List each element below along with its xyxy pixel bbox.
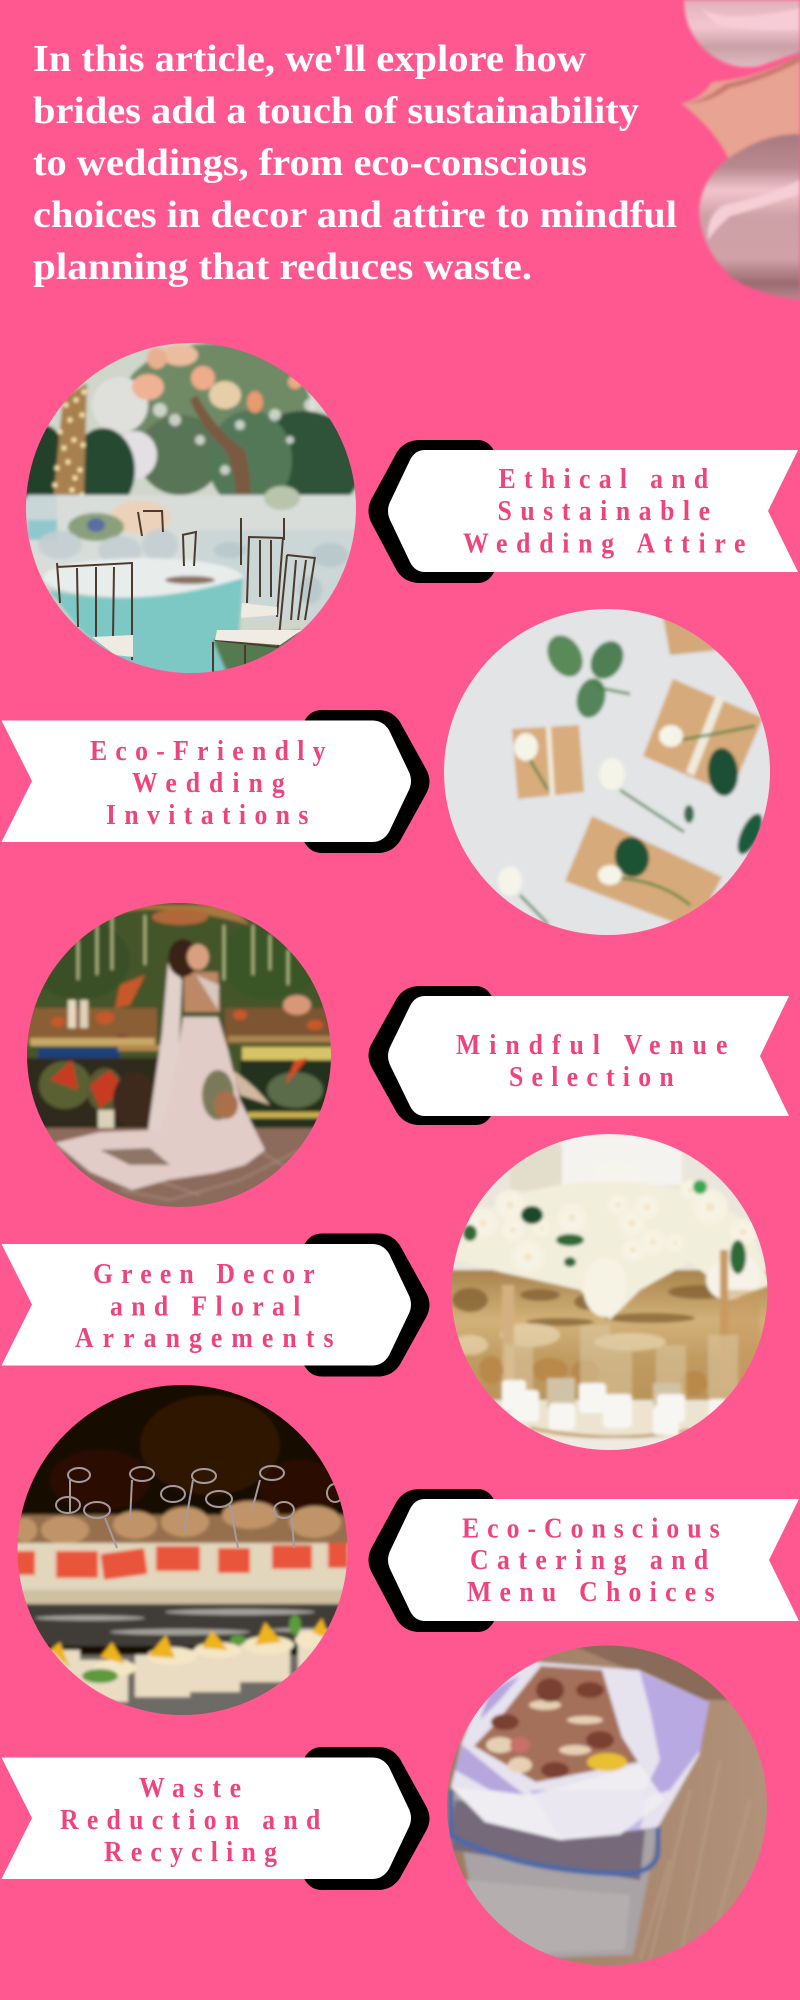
intro paragraph	[33, 38, 677, 288]
photo: food waste in a bin	[440, 1640, 775, 1975]
ribbon label: and Floral	[110, 1291, 301, 1322]
intro paragraph: to weddings, from eco-conscious	[33, 142, 587, 184]
ribbon: green decor	[2, 1234, 430, 1376]
ribbon shadow	[302, 1234, 430, 1376]
intro paragraph: planning that reduces waste.	[33, 246, 532, 288]
ribbon body	[388, 450, 798, 572]
ribbon label: Arrangements	[75, 1322, 334, 1353]
ribbon label	[60, 1772, 320, 1867]
photo: catering canapes	[13, 1380, 355, 1720]
intro paragraph: brides add a touch of sustainability	[33, 90, 639, 132]
ribbon label: Reduction and	[60, 1804, 320, 1835]
ribbon shadow	[368, 440, 496, 583]
decoration: lipstick swatches	[681, 0, 800, 300]
ribbon label: Recycling	[104, 1836, 277, 1867]
intro paragraph: choices in decor and attire to mindful	[33, 194, 677, 236]
ribbon label: Wedding Attire	[463, 528, 745, 559]
ribbon label: Wedding	[132, 767, 285, 798]
ribbon shadow	[368, 986, 494, 1125]
ribbon: ethical attire	[368, 440, 798, 583]
ribbon label: Sustainable	[498, 495, 710, 526]
ribbon label	[462, 1513, 720, 1607]
ribbon body	[2, 1758, 411, 1879]
ribbon label: Invitations	[106, 799, 308, 830]
ribbon shadow	[302, 710, 430, 853]
photo: white floral arrangement	[445, 1130, 775, 1458]
ribbon: mindful venue	[368, 986, 789, 1125]
photo: bride at green venue	[20, 900, 340, 1213]
ribbon: eco-friendly invitations	[2, 710, 430, 853]
intro paragraph: In this article, we'll explore how	[33, 38, 587, 80]
photo: outdoor reception venue	[17, 340, 363, 680]
ribbon body	[2, 720, 411, 842]
ribbon label: Menu Choices	[467, 1576, 714, 1607]
ribbon shadow	[368, 1489, 496, 1632]
ribbon label: Eco-Friendly	[90, 735, 326, 766]
ribbon label	[463, 463, 745, 559]
ribbon: waste reduction	[2, 1747, 430, 1890]
ribbon label: Catering and	[470, 1544, 708, 1575]
ribbon label: Selection	[509, 1061, 674, 1092]
photo: kraft paper invitations with roses	[440, 600, 775, 940]
ribbon: eco-conscious catering	[368, 1489, 799, 1632]
ribbon label: Mindful Venue	[456, 1029, 727, 1060]
ribbon body	[2, 1244, 411, 1366]
ribbon shadow	[302, 1747, 430, 1890]
ribbon label	[75, 1258, 334, 1353]
ribbon body	[388, 1499, 799, 1621]
ribbon label	[456, 1029, 727, 1092]
ribbon label: Waste	[139, 1772, 241, 1803]
ribbon label: Eco-Conscious	[462, 1513, 720, 1544]
ribbon label	[90, 735, 326, 830]
ribbon label: Ethical and	[498, 463, 708, 494]
ribbon label: Green Decor	[93, 1258, 315, 1289]
ribbon body	[388, 996, 789, 1116]
